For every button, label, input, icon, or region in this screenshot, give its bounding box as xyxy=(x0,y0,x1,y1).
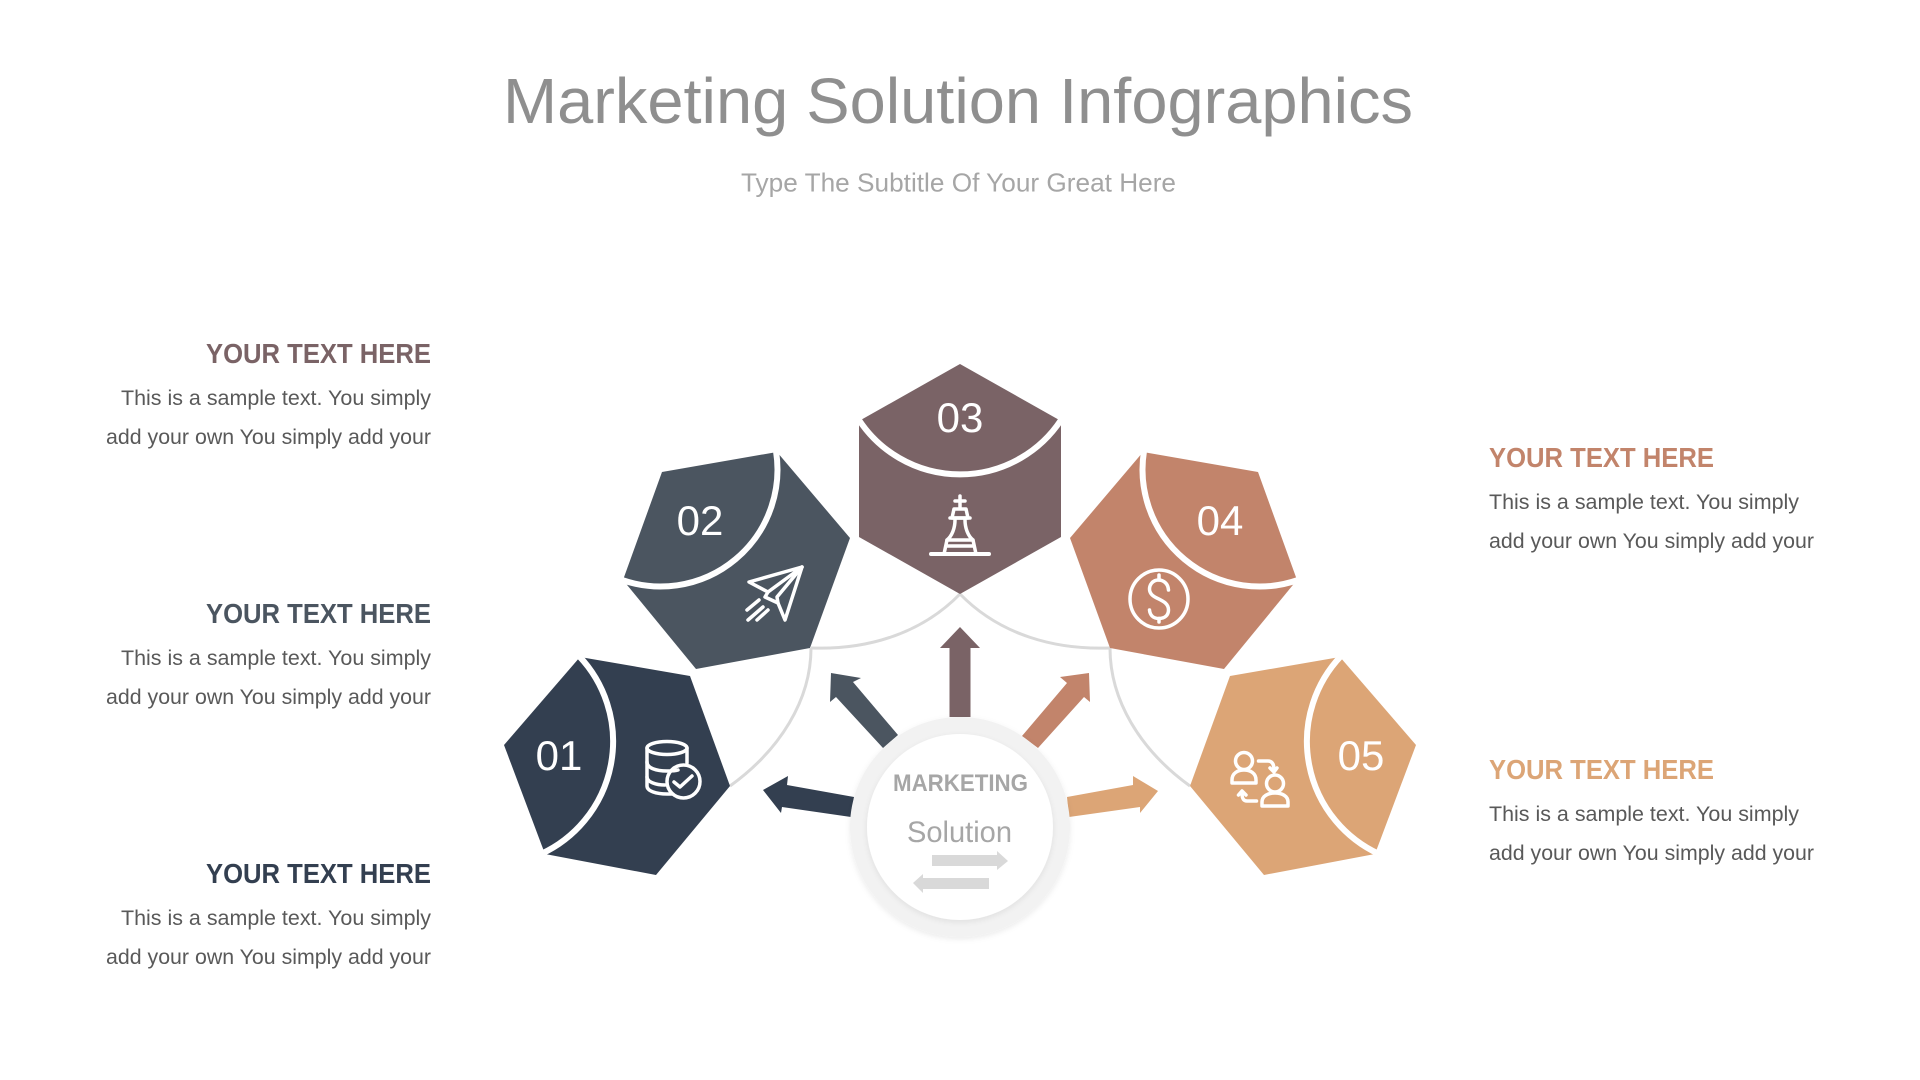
center circle xyxy=(850,717,1070,937)
arrow: to 04 xyxy=(1022,673,1090,748)
arrow: to 05 xyxy=(1067,776,1158,817)
text block: left bottom: This is a sample text. You simply xyxy=(121,906,431,930)
icon: dollar coin xyxy=(1130,570,1188,628)
text block: right bottom xyxy=(1489,754,1814,865)
text block: left top: add your own You simply add your xyxy=(106,425,431,449)
hexagon 01: 01 xyxy=(536,732,582,779)
text block: left middle: YOUR TEXT HERE xyxy=(206,598,431,629)
icon: people exchange xyxy=(1232,752,1288,806)
text block: left bottom xyxy=(106,858,431,969)
small arrow right xyxy=(932,851,1008,870)
text block: left top: This is a sample text. You simply xyxy=(121,386,431,410)
hexagon 02: 02 xyxy=(677,497,723,544)
hexagon 03: 03 xyxy=(937,394,983,441)
title: Marketing Solution Infographics xyxy=(503,65,1413,137)
text block: right bottom: add your own You simply add your xyxy=(1489,841,1814,865)
text block: right bottom: This is a sample text. You simply xyxy=(1489,802,1799,826)
hexagon 05 xyxy=(1190,656,1416,875)
hexagon 04: 04 xyxy=(1197,497,1243,544)
text block: right bottom: YOUR TEXT HERE xyxy=(1489,754,1714,785)
hexagon 04 xyxy=(1070,451,1298,669)
subtitle: Type The Subtitle Of Your Great Here xyxy=(741,168,1176,198)
text block: left bottom: add your own You simply add your xyxy=(106,945,431,969)
text block: right top: YOUR TEXT HERE xyxy=(1489,442,1714,473)
text block: right top xyxy=(1489,442,1814,553)
icon: database check xyxy=(647,742,700,798)
text block: left middle xyxy=(106,598,431,709)
text block: right top: add your own You simply add your xyxy=(1489,529,1814,553)
hexagon 03 xyxy=(859,364,1061,594)
text block: left top xyxy=(106,338,431,449)
text block: left middle: add your own You simply add your xyxy=(106,685,431,709)
arrow: to 02 xyxy=(830,673,898,748)
text block: left top: YOUR TEXT HERE xyxy=(206,338,431,369)
text block: left middle: This is a sample text. You simply xyxy=(121,646,431,670)
center label: solution: Solution xyxy=(907,816,1012,849)
center label: marketing: MARKETING xyxy=(893,770,1028,797)
icon: chess king xyxy=(931,496,989,554)
small arrow left xyxy=(913,874,989,893)
arrow: to 01 xyxy=(763,776,854,817)
hexagon 02 xyxy=(622,451,850,669)
connector curves xyxy=(730,594,1190,786)
arrow: to 03 xyxy=(940,627,980,717)
hexagon 05: 05 xyxy=(1338,732,1384,779)
text block: right top: This is a sample text. You simply xyxy=(1489,490,1799,514)
text block: left bottom: YOUR TEXT HERE xyxy=(206,858,431,889)
hexagon 01 xyxy=(504,656,730,875)
icon: paper plane xyxy=(747,567,802,620)
